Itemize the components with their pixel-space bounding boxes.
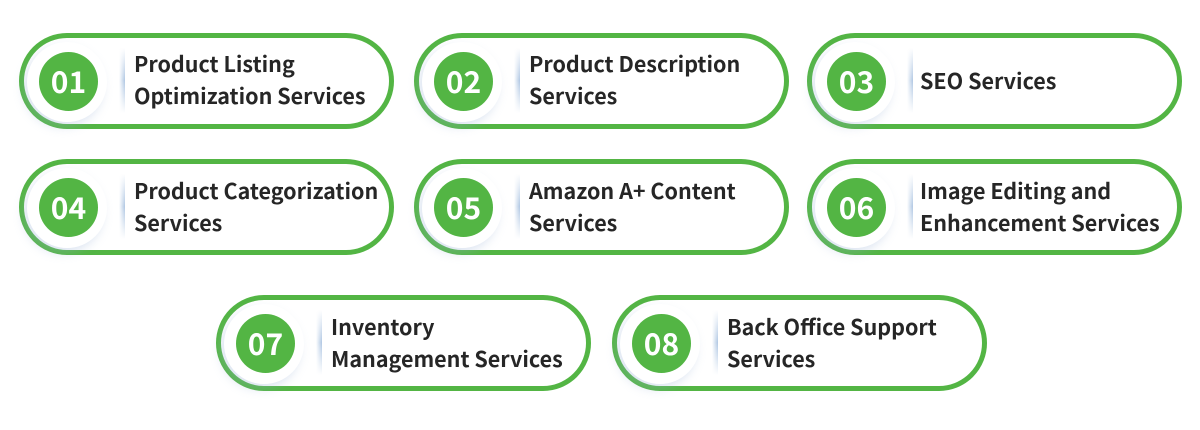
- divider 06: [907, 174, 913, 239]
- text 08: Back Office Support: [727, 310, 937, 342]
- text 07: Inventory: [331, 310, 434, 342]
- number 01: 01: [51, 58, 86, 102]
- pill 05: [414, 159, 789, 255]
- number 03: [827, 52, 886, 110]
- number 04: 04: [51, 184, 86, 228]
- text 01: Product Listing: [134, 48, 295, 78]
- text 02: Services: [529, 80, 617, 110]
- number 04: [39, 178, 98, 236]
- divider 05: [514, 174, 520, 239]
- icon: number 03 halo: [815, 42, 895, 122]
- pill 04: [19, 159, 394, 255]
- divider 04: [119, 174, 125, 239]
- icon: number 02 halo: [422, 42, 502, 122]
- text 02: [529, 48, 740, 110]
- text 06: Enhancement Services: [920, 206, 1160, 238]
- number 01: [39, 52, 98, 110]
- icon: number 08 halo: [620, 304, 700, 384]
- icon: number 07 halo: [224, 304, 304, 384]
- pill 08: [612, 295, 987, 391]
- number 02: 02: [446, 58, 481, 102]
- text 06: [920, 174, 1160, 238]
- icon: number 06 halo: [815, 168, 895, 248]
- text 01: Optimization Services: [134, 80, 366, 110]
- text 07: [331, 310, 563, 374]
- number 02: [434, 52, 493, 110]
- number 06: 06: [839, 184, 874, 228]
- divider 02: [514, 48, 520, 113]
- text 05: [528, 174, 736, 238]
- divider 01: [119, 48, 125, 113]
- pill 02: [414, 33, 789, 129]
- text 04: [134, 174, 378, 238]
- text 01: [134, 48, 366, 110]
- number 05: 05: [446, 184, 481, 228]
- number 07: 07: [248, 320, 283, 364]
- icon: number 04 halo: [27, 168, 107, 248]
- number 08: 08: [644, 320, 679, 364]
- icon: number 05 halo: [422, 168, 502, 248]
- number 06: [827, 178, 886, 236]
- text 06: Image Editing and: [920, 174, 1111, 206]
- pill 06: [807, 159, 1182, 255]
- text 03: SEO Services: [920, 64, 1056, 96]
- text 04: Product Categorization: [134, 174, 378, 206]
- pill 07: [216, 295, 591, 391]
- text 08: [727, 310, 937, 374]
- number 07: [236, 314, 295, 372]
- number 03: 03: [839, 58, 874, 102]
- number 08: [632, 314, 691, 372]
- text 08: Services: [727, 342, 815, 374]
- divider 08: [712, 310, 718, 375]
- number 05: [434, 178, 493, 236]
- icon: number 01 halo: [27, 42, 107, 122]
- text 02: Product Description: [529, 48, 740, 78]
- text 07: Management Services: [331, 342, 563, 374]
- divider 07: [316, 310, 322, 375]
- text 05: Amazon A+ Content: [529, 174, 736, 206]
- text 04: Services: [134, 206, 222, 238]
- divider 03: [907, 48, 913, 113]
- text 05: Services: [529, 206, 617, 238]
- pill 03: [807, 33, 1182, 129]
- pill 01: [19, 33, 394, 129]
